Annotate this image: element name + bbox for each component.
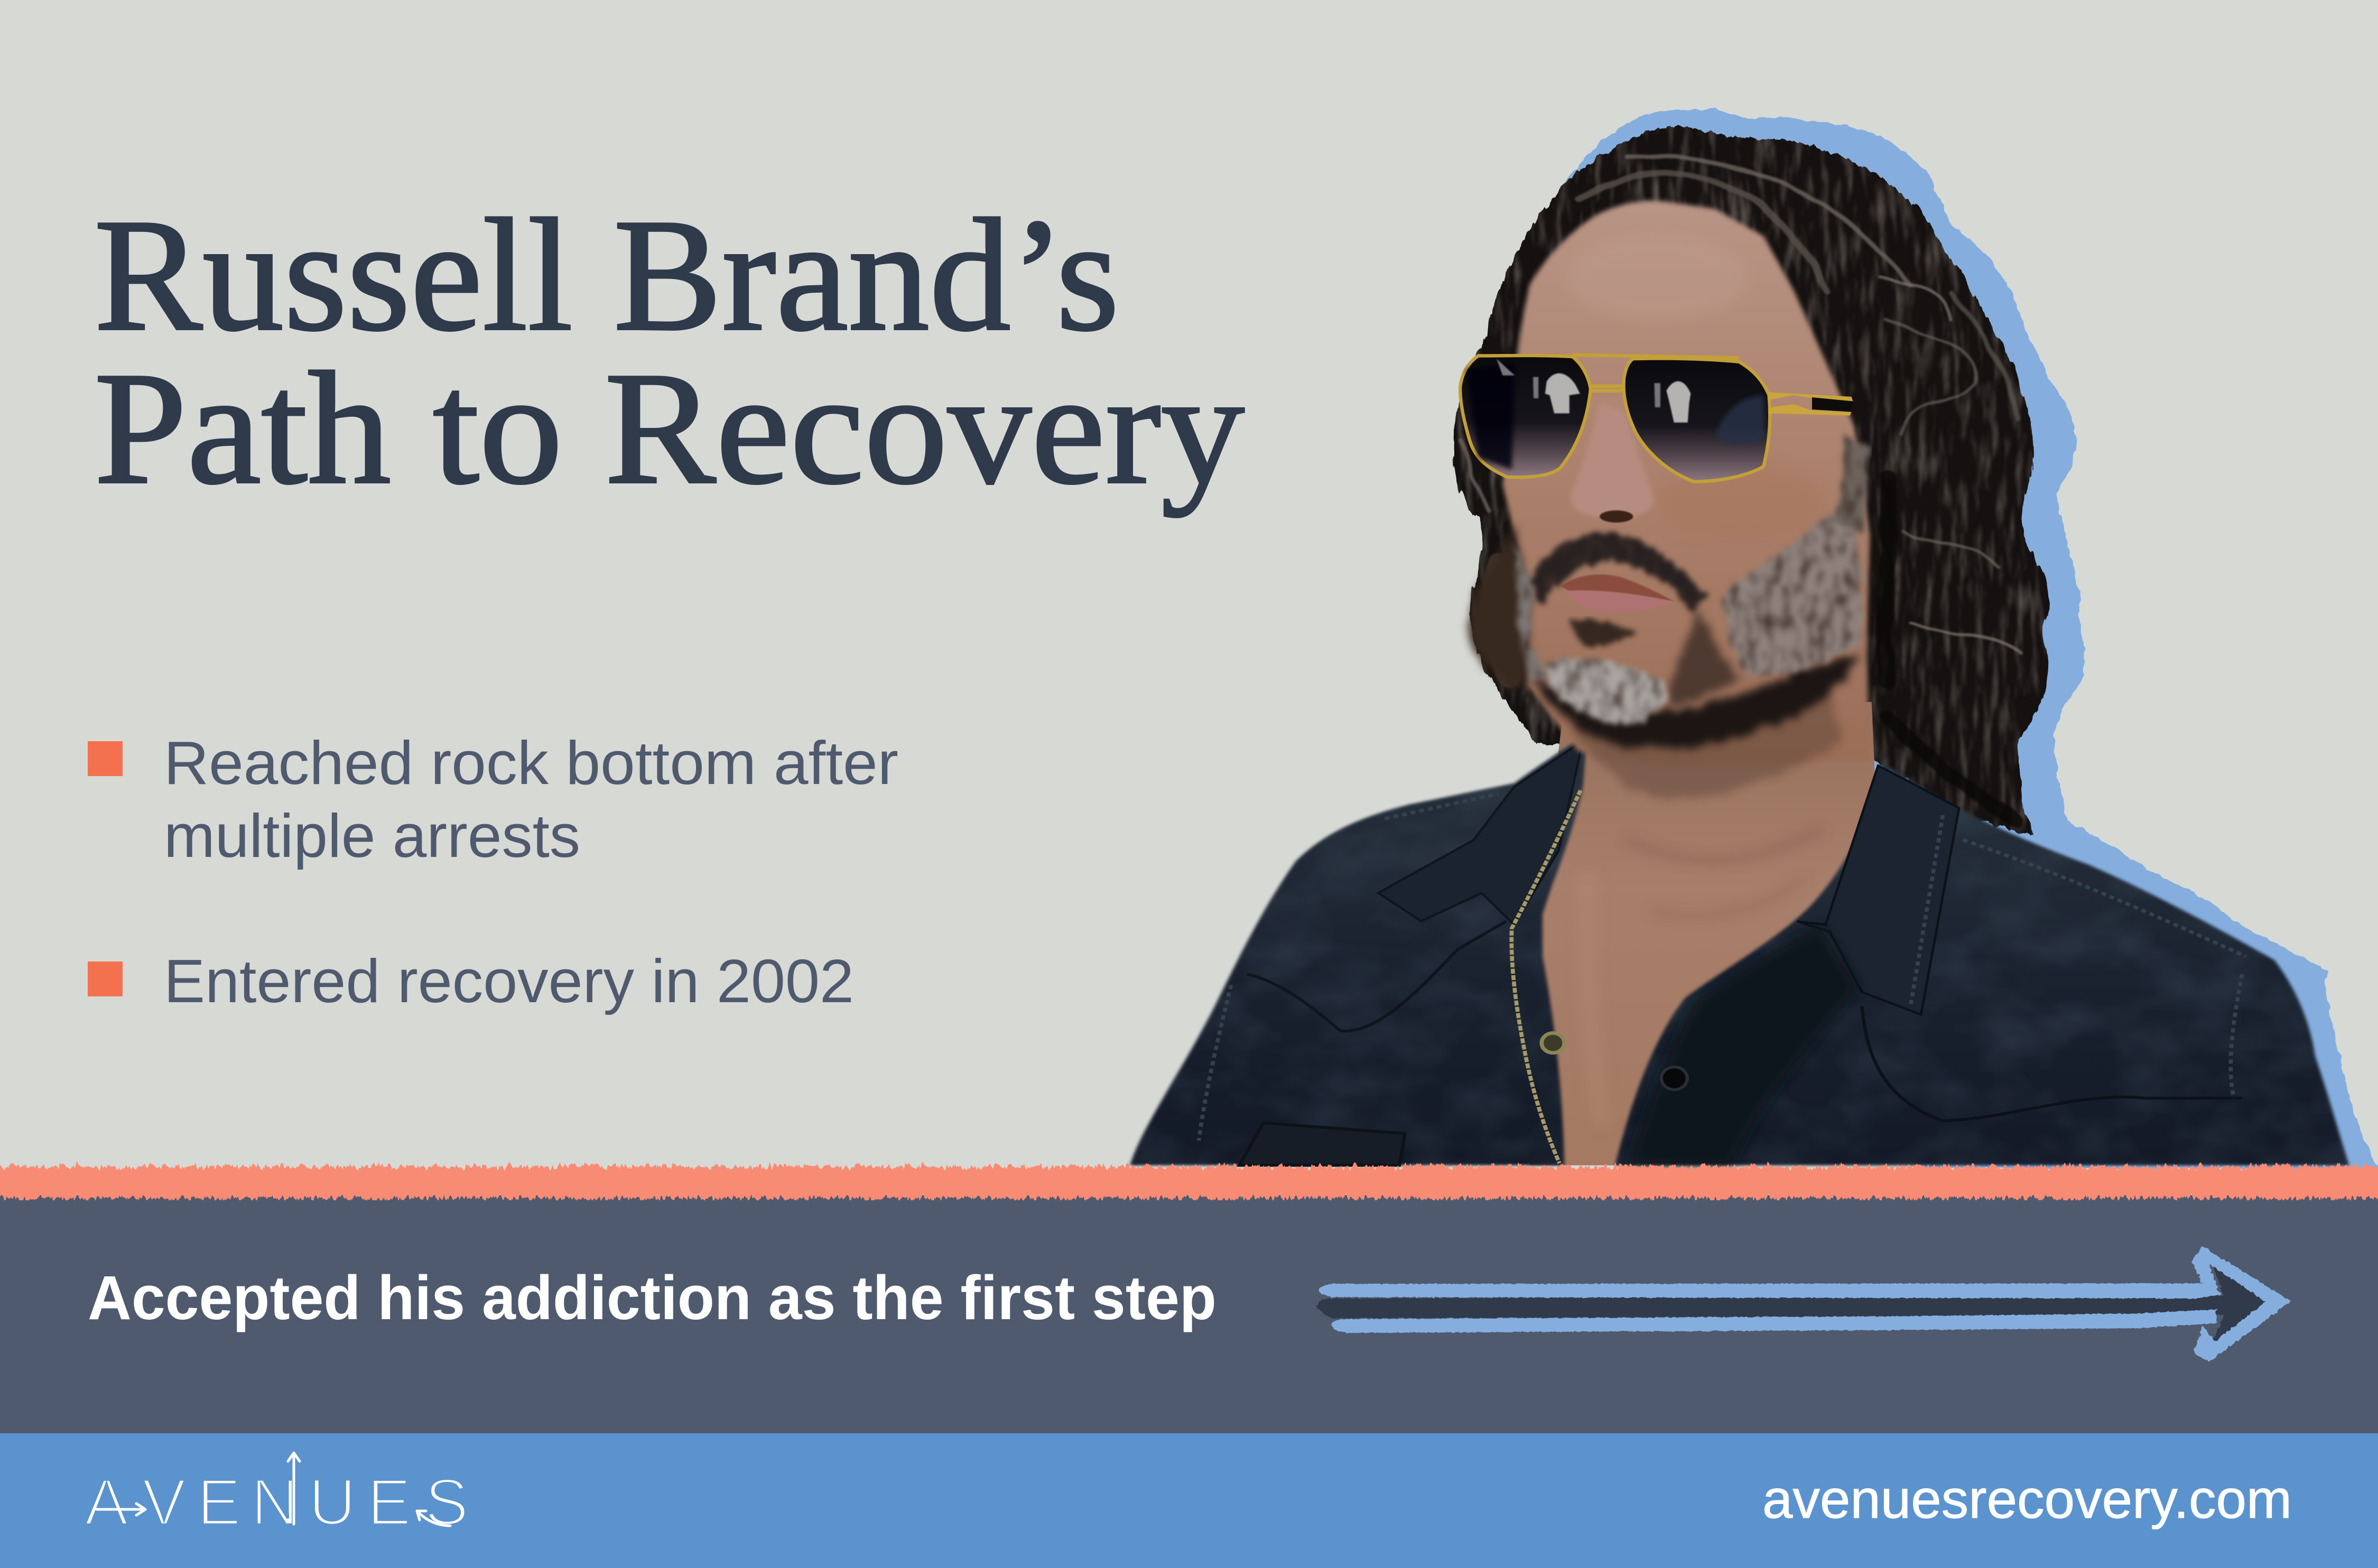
beard mid shadow	[1666, 606, 1742, 704]
snap button	[1541, 1033, 1564, 1053]
bullet: rock bottom: Reached rock bottom after	[164, 729, 898, 797]
avenues logo	[85, 1453, 469, 1539]
bullet: rock bottom	[88, 729, 898, 870]
left lens	[1460, 356, 1591, 477]
black button	[1661, 1067, 1687, 1090]
lower lip	[1568, 591, 1674, 613]
forehead highlight	[1566, 236, 1748, 321]
banner tufted top edge	[0, 1198, 2378, 1209]
left yoke seam	[1247, 921, 1506, 1031]
shirt left side	[1130, 734, 1587, 1165]
neck and chest skin	[1498, 702, 1877, 1165]
arrow head	[2191, 1246, 2291, 1362]
banner text: Accepted his addiction as the first step	[88, 1263, 1216, 1333]
jaw dark beard	[1530, 655, 1861, 748]
soul patch	[1569, 620, 1639, 647]
right cheek beard	[1724, 506, 1862, 676]
website url: avenuesrecovery.com	[1762, 1469, 2292, 1529]
right lens	[1624, 359, 1770, 482]
title: Russell Brand’s	[94, 185, 1119, 364]
blue torn-paper backing behind portrait	[1563, 109, 2378, 1169]
temple arm dark inlay	[1812, 397, 1853, 412]
shirt	[1130, 734, 2349, 1165]
arrow core	[1317, 1265, 2268, 1342]
right yoke seam	[1862, 1006, 2242, 1121]
sunglasses	[1460, 355, 1853, 482]
hair	[1451, 126, 2048, 836]
dark banner	[0, 1198, 2378, 1433]
right sideburn grey	[1833, 433, 1866, 533]
face skin	[1503, 201, 1870, 767]
lens reflection figure right	[1666, 381, 1690, 423]
moustache	[1530, 531, 1709, 612]
arrow top stroke	[1318, 1283, 2222, 1299]
gold chain	[1511, 790, 1581, 1163]
right collar	[1797, 766, 1959, 1015]
arrow bottom stroke	[1331, 1310, 2216, 1333]
left sideburn beard	[1469, 527, 1530, 694]
footer bar	[0, 1433, 2378, 1568]
shirt placket shadow	[1628, 925, 1858, 1165]
shoulder stitching	[1199, 794, 2246, 1141]
blue reflection	[1715, 395, 1765, 444]
lens reflection figure left	[1545, 374, 1580, 413]
temple arm	[1768, 392, 1853, 415]
neck creases and shading	[1587, 829, 1822, 1126]
reflection details	[1497, 359, 1660, 407]
chin grey beard	[1545, 657, 1665, 725]
bridge	[1573, 355, 1739, 390]
hand-drawn arrow	[1317, 1246, 2291, 1362]
left grey beard strip	[1515, 542, 1548, 679]
logo wordmark: AVENUES	[85, 1466, 469, 1539]
nose	[1571, 403, 1654, 518]
bullet: rock bottom: multiple arrests	[164, 801, 580, 870]
face	[1469, 201, 1870, 799]
portrait illustration	[1130, 126, 2349, 1165]
bullet list	[88, 729, 898, 1015]
title: Path to Recovery	[94, 339, 1244, 518]
title	[94, 185, 1244, 518]
logo arrows	[97, 1453, 450, 1526]
salmon brush band	[0, 1166, 2378, 1198]
shirt right side	[1615, 762, 2349, 1165]
nostril	[1600, 510, 1633, 522]
left collar	[1378, 741, 1583, 925]
breast pocket	[1239, 1123, 1405, 1165]
left lens dark shadow	[1466, 363, 1515, 470]
upper lip	[1560, 574, 1674, 601]
neck stubble	[1563, 694, 1842, 799]
hair strands	[1462, 155, 2020, 822]
bullet: entered recovery: Entered recovery in 2002	[164, 947, 854, 1015]
cheek warmth	[1657, 463, 1827, 542]
